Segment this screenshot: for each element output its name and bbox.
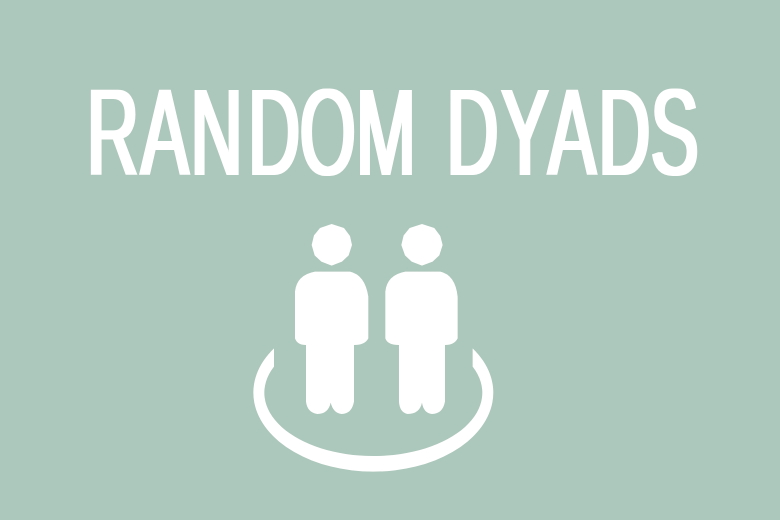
icon: floor ring xyxy=(253,348,493,472)
icon: left person xyxy=(295,224,368,414)
title: RANDOM DYADS xyxy=(87,65,699,202)
icon: right person xyxy=(385,224,458,414)
icon: two people standing in a circle xyxy=(253,224,493,472)
